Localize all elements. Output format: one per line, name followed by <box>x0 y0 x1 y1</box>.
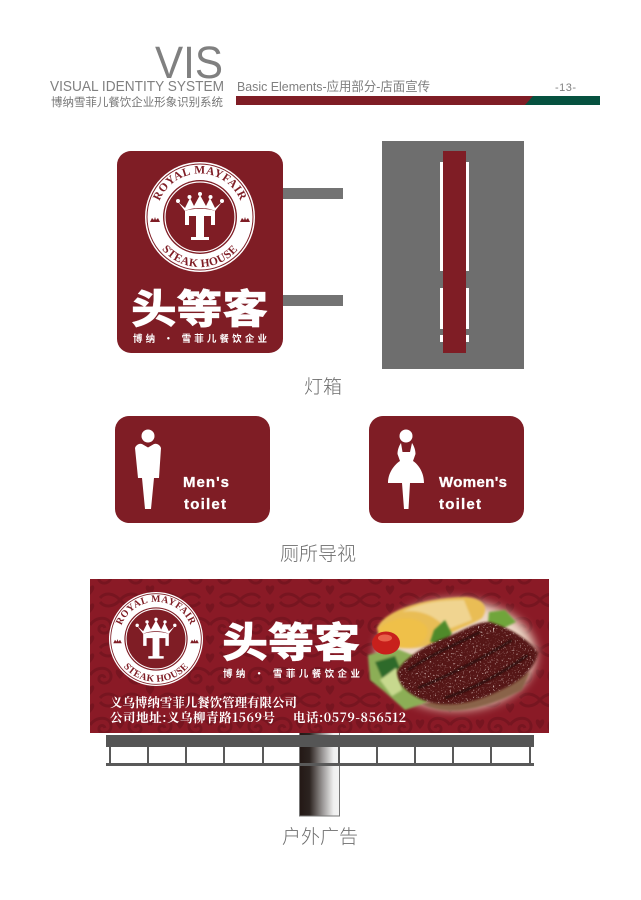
panel: men's toilet sign <box>115 416 270 523</box>
panel: lightbox side view <box>382 141 524 369</box>
lightbox body <box>117 151 283 353</box>
brand subtitle: 博纳 · 雪菲儿餐饮企业 <box>133 331 267 345</box>
tomato <box>372 632 400 654</box>
potatoes <box>377 597 485 648</box>
phone: 电话:0579-856512 <box>293 708 406 726</box>
company system name: 博纳雪菲儿餐饮企业形象识别系统 <box>51 95 224 109</box>
VIS title: VIS <box>155 37 223 88</box>
logo: Royal Mayfair: STEAK HOUSE <box>162 245 238 268</box>
caption: outdoor advertising: 户外广告 <box>282 826 358 848</box>
logo: Royal Mayfair: ROYAL MAYFAIR <box>152 166 246 201</box>
header: section title: Basic Elements-应用部分-店面宣传 <box>237 79 430 94</box>
beam <box>106 735 534 747</box>
toilet label: toilet <box>439 496 481 513</box>
header: VIS block <box>50 37 224 109</box>
lightbox mounting arms <box>283 188 343 306</box>
icon: crown and table <box>176 192 224 240</box>
caption: lightbox: 灯箱 <box>304 376 342 398</box>
brand name: 头等客 <box>222 609 360 669</box>
small crowns <box>113 639 199 643</box>
caption: toilet signage: 厕所导视 <box>280 543 356 565</box>
panel: lightbox front <box>117 151 343 353</box>
panel: billboard <box>90 579 549 733</box>
pole <box>300 730 340 816</box>
panel: women's toilet sign <box>369 416 524 523</box>
toilet label: toilet <box>184 496 226 513</box>
icon: man <box>135 430 161 509</box>
system subtitle: VISUAL IDENTITY SYSTEM <box>50 78 224 95</box>
logo: Royal Mayfair: STEAK HOUSE <box>124 663 188 682</box>
brand subtitle: 博纳 · 雪菲儿餐饮企业 <box>223 666 360 680</box>
logo: Royal Mayfair <box>145 162 255 272</box>
brand name: 头等客 <box>131 277 268 335</box>
women's label: Women's <box>439 474 507 491</box>
icon: woman <box>388 430 424 509</box>
page number: -13- <box>555 82 576 94</box>
logo: Royal Mayfair <box>108 592 203 686</box>
small crowns <box>150 217 250 222</box>
icon: crown and table <box>135 618 177 659</box>
logo: Royal Mayfair: ROYAL MAYFAIR <box>116 595 196 626</box>
steak <box>397 622 538 711</box>
billboard patterned background <box>90 579 549 733</box>
address: 公司地址:义乌柳青路1569号 <box>110 708 275 726</box>
billboard structure <box>106 730 534 816</box>
steak photo <box>368 597 538 711</box>
truss <box>106 747 534 766</box>
company name: 义乌博纳雪菲儿餐饮管理有限公司 <box>110 693 297 711</box>
header bar <box>236 96 600 105</box>
lettuce <box>368 610 516 710</box>
men's label: Men's <box>183 474 229 491</box>
